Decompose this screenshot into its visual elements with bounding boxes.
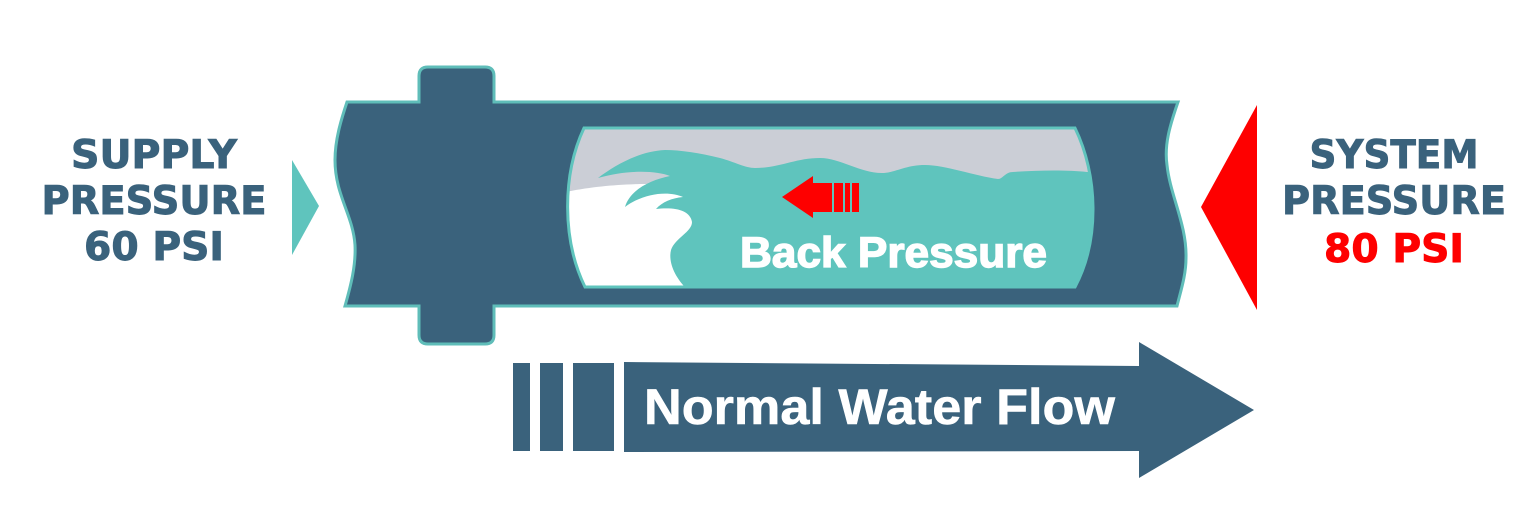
- window background: [568, 128, 1093, 287]
- icon: red back-pressure arrow: [782, 176, 859, 218]
- back pressure label: Back Pressure: [740, 229, 1047, 277]
- arrow tail bars: [513, 363, 614, 451]
- system pressure label: [1282, 133, 1506, 272]
- supply pressure label: SUPPLY: [71, 133, 238, 178]
- back pressure diagram: [44, 66, 1504, 478]
- flow label: Normal Water Flow: [644, 379, 1115, 435]
- icon: supply pressure triangle: [292, 160, 319, 255]
- normal water flow arrow: [513, 342, 1254, 478]
- supply pressure label: PRESSURE: [42, 179, 266, 224]
- window: water chamber: [560, 128, 1110, 290]
- supply pressure label: [42, 133, 266, 270]
- supply pressure label: 60 PSI: [84, 225, 224, 270]
- teal wave: [598, 150, 1110, 290]
- system pressure label: SYSTEM: [1310, 133, 1478, 178]
- system pressure label: 80 PSI: [1324, 227, 1464, 272]
- window outline: [568, 128, 1093, 287]
- system pressure label: PRESSURE: [1282, 179, 1506, 224]
- white foam area: [569, 184, 692, 286]
- pipe body: [335, 67, 1186, 344]
- icon: system pressure triangle: [1201, 105, 1257, 310]
- pipe with flange: [335, 67, 1186, 344]
- arrow body: [624, 342, 1254, 478]
